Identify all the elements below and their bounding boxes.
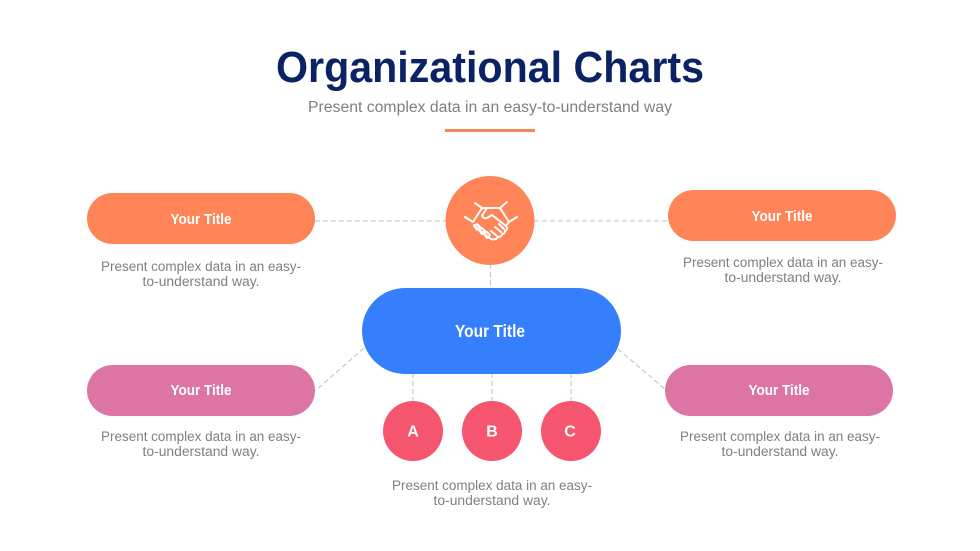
panel: top right: Your Title bbox=[752, 208, 812, 225]
bottom description: to-understand way. bbox=[434, 493, 550, 508]
panel: bottom left: Your Title bbox=[170, 382, 232, 399]
subtitle: Present complex data in an easy-to-understand way bbox=[308, 99, 672, 116]
bottom description: Present complex data in an easy- bbox=[392, 478, 592, 493]
title: Organizational Charts bbox=[276, 43, 704, 92]
panel: bottom right: Present complex data in an easy- bbox=[680, 429, 880, 444]
circle B bbox=[462, 401, 522, 461]
panel: bottom right: to-understand way. bbox=[722, 444, 838, 459]
panel: bottom left: Present complex data in an easy- bbox=[101, 429, 301, 444]
bottom description bbox=[392, 478, 592, 508]
panel: top right bbox=[668, 190, 896, 285]
panel: top left: Present complex data in an easy- bbox=[101, 259, 301, 274]
panel: bottom right: Your Title bbox=[748, 382, 810, 399]
panel: top right: Present complex data in an easy- bbox=[683, 255, 883, 270]
panel: bottom right bbox=[665, 365, 893, 459]
connector lines bbox=[315, 221, 669, 401]
icon: handshake bbox=[446, 176, 534, 265]
panel: center blue: Your Title bbox=[455, 321, 525, 341]
panel: center blue bbox=[362, 288, 621, 374]
panel: top left: to-understand way. bbox=[142, 274, 260, 289]
panel: bottom left bbox=[87, 365, 315, 459]
circle A: A bbox=[407, 424, 419, 440]
circle C: C bbox=[564, 424, 576, 440]
circle C bbox=[541, 401, 601, 461]
panel: top left bbox=[87, 193, 315, 289]
panel: top left: Your Title bbox=[170, 211, 232, 228]
title underline bbox=[445, 129, 535, 132]
panel: bottom left: to-understand way. bbox=[142, 444, 260, 459]
panel: top right: to-understand way. bbox=[724, 270, 842, 285]
circle B: B bbox=[486, 424, 498, 440]
circle A bbox=[383, 401, 443, 461]
